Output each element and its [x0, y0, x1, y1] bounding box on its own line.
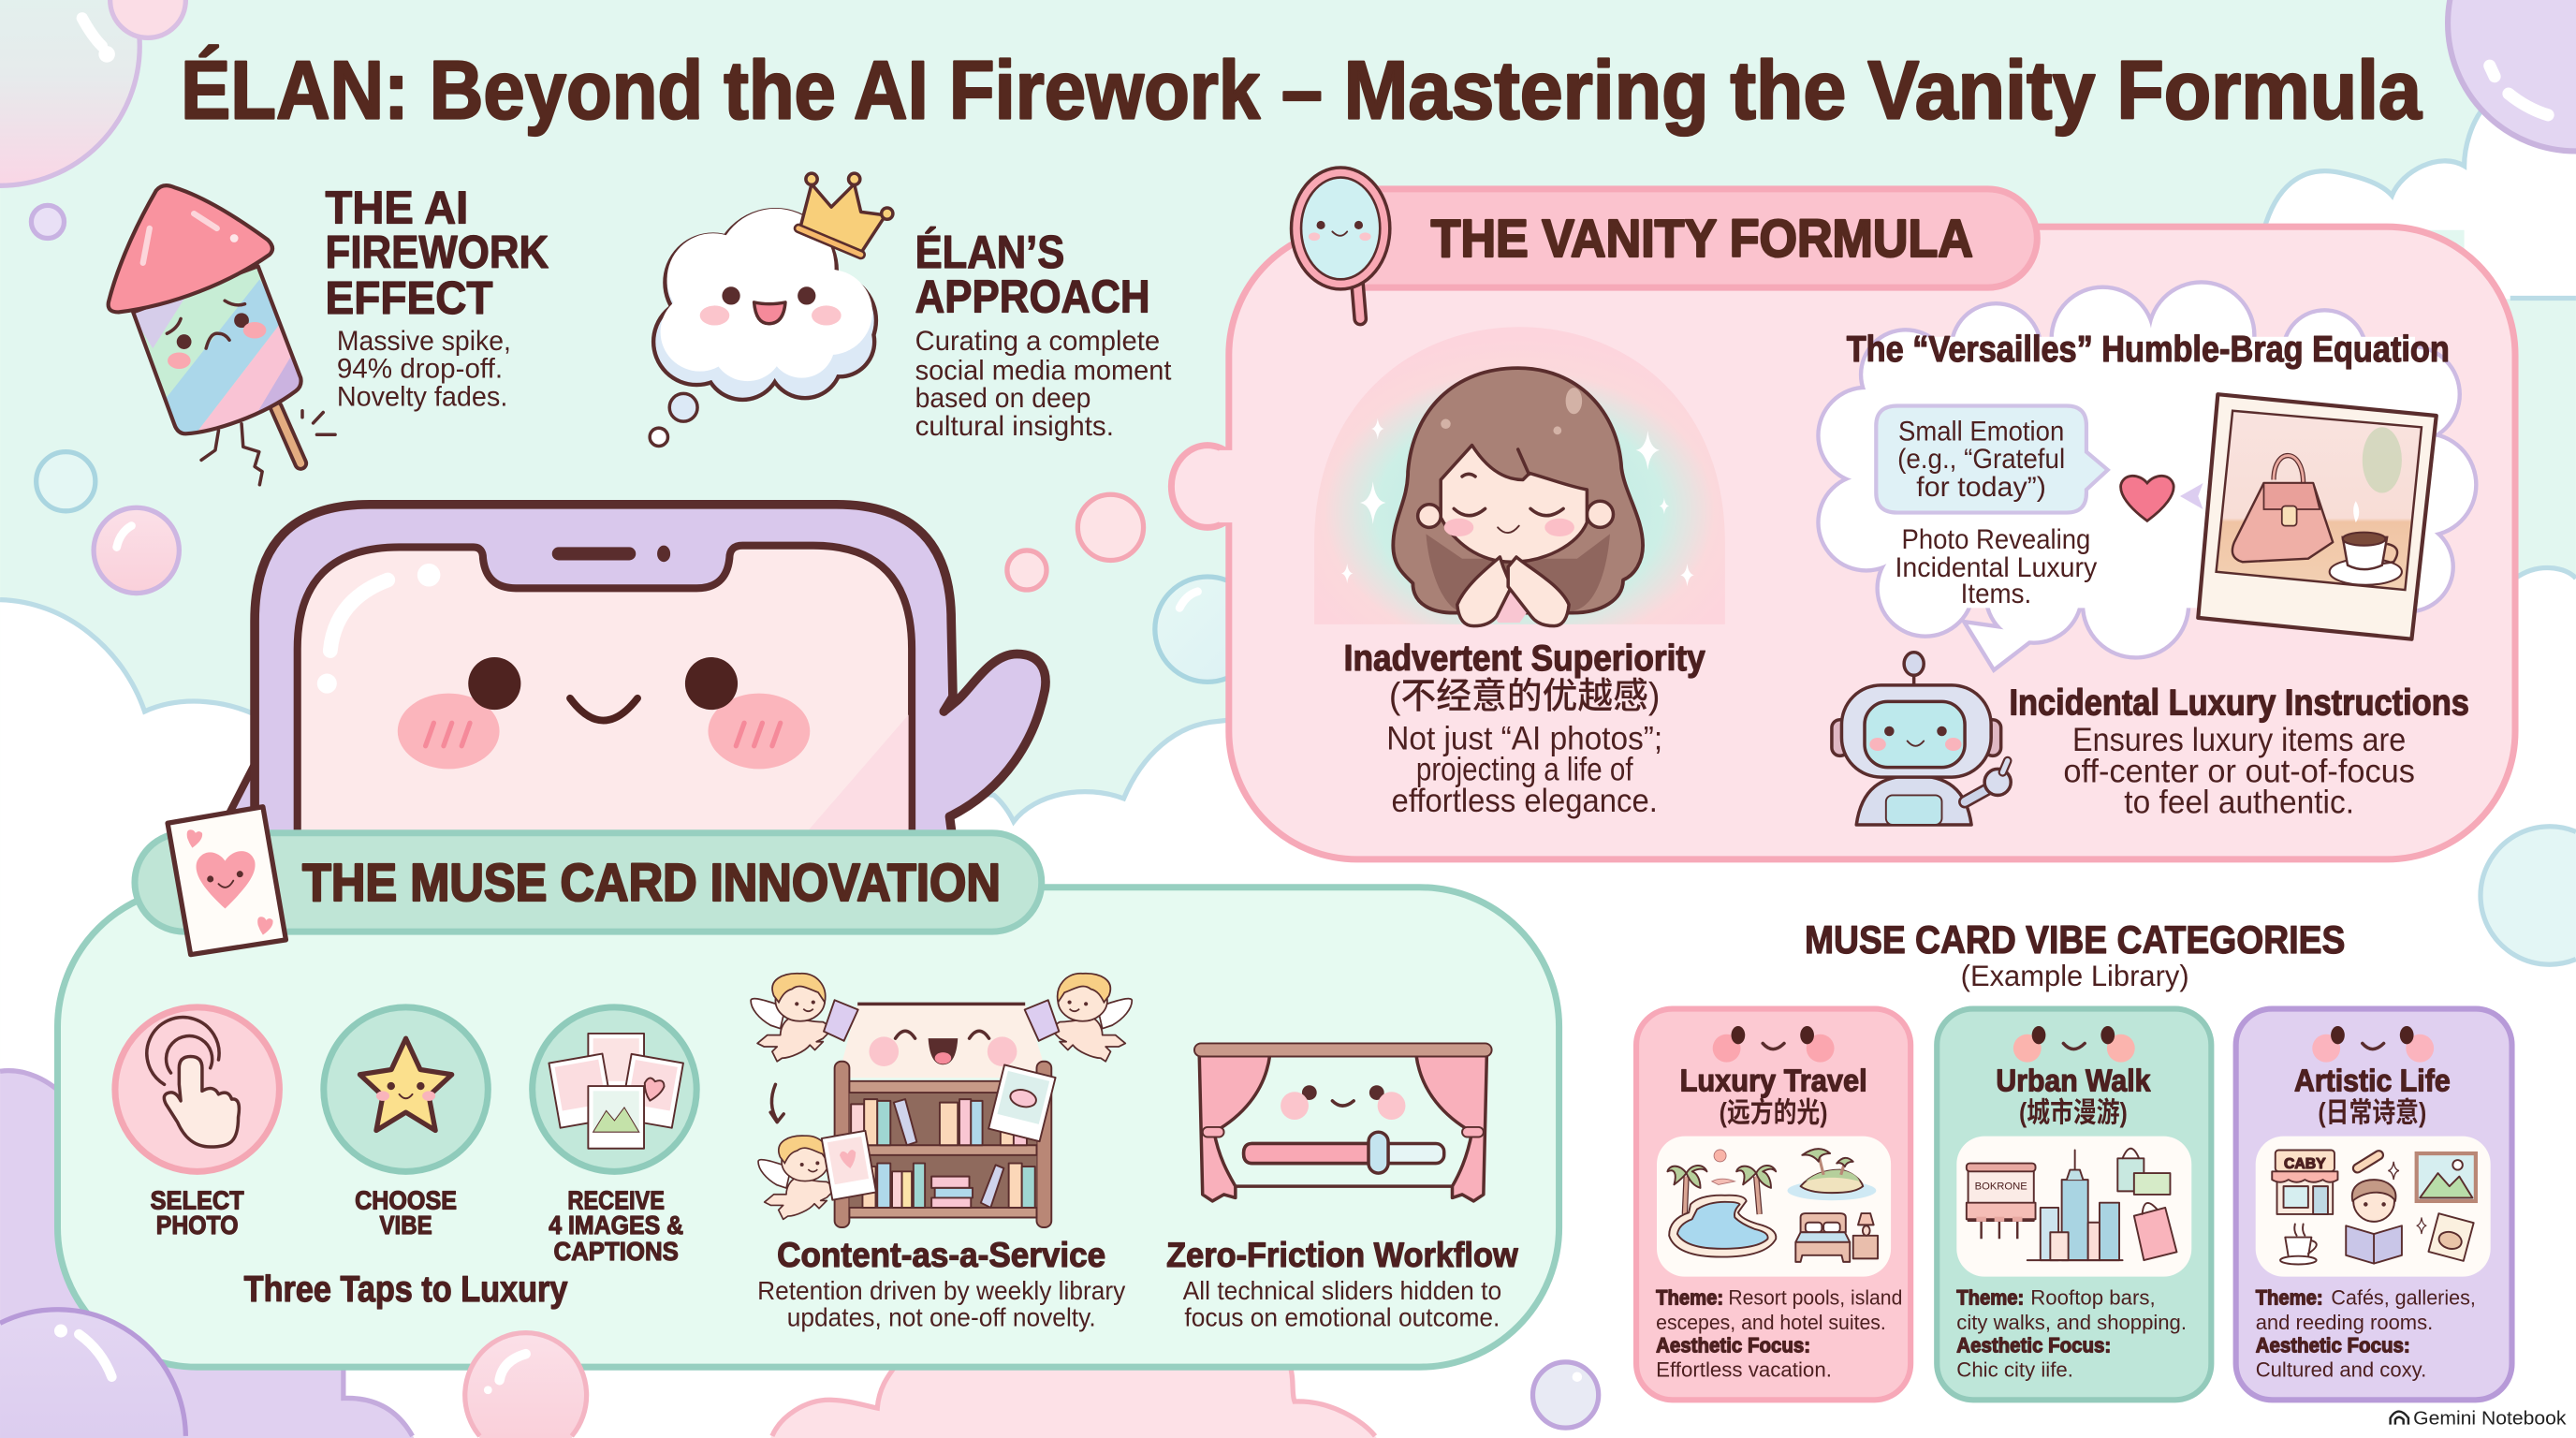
- heading: humble-brag equation: The “Versailles” Humble-Brag Equation: [1847, 330, 2450, 370]
- step 3: receive images and captions: CAPTIONS: [554, 1237, 679, 1266]
- text: artistic life theme: and reeding rooms.: [2256, 1311, 2433, 1334]
- card: urban walk: (城市漫游): [2019, 1098, 2128, 1129]
- watermark: Gemini Notebook: Gemini Notebook: [2413, 1409, 2567, 1430]
- step 1: select photo: SELECT: [151, 1186, 244, 1215]
- heading pill: the vanity formula: [1314, 189, 2037, 287]
- text: Élan's approach: ÉLAN’S: [915, 226, 1064, 278]
- title: ÉLAN: Beyond the AI Firework: [181, 44, 1260, 136]
- icon: heart playing card: [168, 807, 285, 955]
- text: zero friction workflow: All technical sliders hidden to: [1183, 1276, 1501, 1305]
- text: the AI firework effect: Novelty fades.: [337, 381, 507, 412]
- step 2: choose vibe: VIBE: [379, 1211, 432, 1240]
- text: incidental luxury instructions: off-center or out-of-focus: [2063, 753, 2415, 789]
- text: Élan's approach: [915, 226, 1172, 442]
- text: zero friction workflow: Zero-Friction Workflow: [1166, 1236, 1518, 1274]
- text: the AI firework effect: [326, 183, 549, 412]
- heading pill: muse card innovation: [135, 833, 1042, 932]
- step 1: select photo: PHOTO: [156, 1211, 239, 1240]
- text: zero friction workflow: [1166, 1236, 1518, 1331]
- card: luxury travel: (远方的光): [1720, 1098, 1828, 1129]
- title: Mastering the Vanity Formula: [1344, 44, 2422, 136]
- text: luxury travel theme: Effortless vacation.: [1656, 1358, 1832, 1382]
- text: luxury travel theme: [1656, 1285, 1902, 1382]
- illustration: rooftop bar, skyline and shopping bags: BOKRONE: [1975, 1181, 2027, 1193]
- card: luxury travel: Luxury Travel: [1680, 1064, 1867, 1098]
- speech bubble: small emotion: [1876, 405, 2108, 513]
- text: artistic life theme: Aesthetic Focus:: [2256, 1333, 2410, 1357]
- callout: humble-brag equation cloud: [1821, 285, 2474, 825]
- text: Élan's approach: cultural insights.: [915, 411, 1114, 442]
- background: lilac cloud: [0, 1071, 414, 1438]
- text: luxury travel theme: Resort pools, island: [1728, 1285, 1902, 1309]
- step 1: select photo: [115, 1007, 279, 1240]
- card: artistic life: Artistic Life: [2294, 1064, 2451, 1098]
- text: urban walk theme: Chic city iife.: [1956, 1358, 2073, 1382]
- text: artistic life theme: Cafés, galleries,: [2331, 1285, 2476, 1309]
- illustration: cafe, gallery and reader: CABY: [2284, 1156, 2326, 1172]
- text: the AI firework effect: 94% drop-off.: [337, 354, 503, 385]
- text: photo revealing luxury: Photo Revealing: [1902, 524, 2090, 555]
- text: inadvertent superiority: [1344, 638, 1705, 819]
- card: luxury travel: [1636, 1009, 1910, 1400]
- text: Élan's approach: APPROACH: [915, 271, 1150, 322]
- decorative bubbles: upper area: [0, 0, 2576, 964]
- text: Élan's approach: Curating a complete: [915, 326, 1160, 357]
- title: [181, 44, 2422, 136]
- text: the AI firework effect: Massive spike,: [337, 326, 511, 357]
- heading pill: muse card innovation: THE MUSE CARD INNOVATION: [302, 853, 1001, 912]
- text: inadvertent superiority: effortless elegance.: [1392, 783, 1658, 819]
- step 3: receive images and captions: [533, 1007, 696, 1266]
- icon: friendly robot: [1832, 653, 2011, 825]
- card: artistic life: [2236, 1009, 2511, 1400]
- text: inadvertent superiority: (不经意的优越感): [1389, 676, 1661, 716]
- icon: heart: [2121, 476, 2174, 521]
- heading: muse card vibe categories: (Example Library): [1961, 959, 2189, 992]
- text: urban walk theme: [1956, 1285, 2187, 1382]
- text: incidental luxury instructions: to feel authentic.: [2124, 785, 2354, 821]
- speech bubble: small emotion: for today”): [1916, 472, 2046, 503]
- step 3: receive images and captions: 4 IMAGES &: [549, 1211, 683, 1240]
- arrow: lilac pointer: [2180, 483, 2203, 509]
- heading: muse card vibe categories: [1805, 917, 2345, 992]
- icon: crowned thought cloud: [650, 173, 893, 446]
- background: pink cloud: [770, 1364, 1377, 1438]
- illustration: cupids stocking smiling bookshelf: [751, 974, 1132, 1227]
- text: incidental luxury instructions: Incidental Luxury Instructions: [2009, 682, 2469, 723]
- illustration: resort pool, island and bed: [1667, 1149, 1878, 1262]
- decorative bubbles: lower area: [0, 1310, 1599, 1438]
- caption: three taps to luxury: Three Taps to Luxury: [244, 1269, 568, 1310]
- speech bubble: small emotion: Small Emotion: [1898, 416, 2064, 447]
- icon: smiling hand mirror: [1292, 168, 1390, 318]
- heading pill: the vanity formula: THE VANITY FORMULA: [1431, 209, 1973, 268]
- title: –: [1281, 44, 1323, 136]
- card: urban walk: [1937, 1009, 2211, 1400]
- illustration: smiling phone mascot: [225, 505, 1046, 862]
- text: inadvertent superiority: projecting a life of: [1416, 752, 1633, 788]
- text: Élan's approach: social media moment: [915, 355, 1172, 386]
- text: luxury travel theme: Theme:: [1656, 1285, 1723, 1309]
- text: content as a service: Retention driven by weekly library: [757, 1276, 1125, 1305]
- step 3: receive images and captions: RECEIVE: [567, 1186, 665, 1215]
- text: photo revealing luxury: Incidental Luxury: [1895, 552, 2097, 583]
- text: luxury travel theme: Aesthetic Focus:: [1656, 1333, 1810, 1357]
- illustration: serene girl with rainbow aura: [1314, 327, 1725, 626]
- card: urban walk: Urban Walk: [1996, 1064, 2151, 1098]
- text: inadvertent superiority: Inadvertent Superiority: [1344, 638, 1705, 679]
- text: Élan's approach: based on deep: [915, 383, 1090, 414]
- text: content as a service: updates, not one-off novelty.: [787, 1302, 1096, 1331]
- illustration: curtain hiding sliders: [1194, 1043, 1492, 1201]
- text: photo revealing luxury: [1895, 524, 2097, 609]
- text: urban walk theme: city walks, and shopping.: [1956, 1311, 2187, 1334]
- text: artistic life theme: [2256, 1285, 2476, 1382]
- icon: sad firework rocket: [109, 185, 335, 485]
- text: the AI firework effect: FIREWORK: [326, 227, 549, 278]
- heading: muse card vibe categories: MUSE CARD VIBE CATEGORIES: [1805, 917, 2345, 961]
- illustration: polaroid of bag and coffee: [2198, 394, 2437, 639]
- text: urban walk theme: Theme:: [1956, 1285, 2024, 1309]
- text: content as a service: [757, 1236, 1125, 1331]
- text: the AI firework effect: EFFECT: [326, 273, 493, 324]
- speech bubble: small emotion: (e.g., “Grateful: [1897, 444, 2065, 475]
- text: luxury travel theme: escepes, and hotel suites.: [1656, 1311, 1886, 1334]
- illustration: cafe, gallery and reader: [2272, 1151, 2476, 1264]
- panel: the Muse Card innovation: [57, 807, 1559, 1367]
- text: artistic life theme: Cultured and coxy.: [2256, 1358, 2426, 1382]
- text: the AI firework effect: THE AI: [326, 183, 468, 234]
- panel: the vanity formula: [1171, 168, 2567, 1430]
- text: artistic life theme: Theme:: [2256, 1285, 2323, 1309]
- step 2: choose vibe: CHOOSE: [355, 1186, 457, 1215]
- text: urban walk theme: Rooftop bars,: [2030, 1285, 2156, 1309]
- text: urban walk theme: Aesthetic Focus:: [1956, 1333, 2111, 1357]
- card: artistic life: (日常诗意): [2318, 1098, 2426, 1129]
- text: incidental luxury instructions: Ensures luxury items are: [2072, 722, 2406, 758]
- step 2: choose vibe: [324, 1007, 488, 1240]
- text: content as a service: Content-as-a-Service: [777, 1236, 1105, 1274]
- text: incidental luxury instructions: [2009, 682, 2469, 821]
- text: inadvertent superiority: Not just “AI photos”;: [1386, 720, 1662, 756]
- text: photo revealing luxury: Items.: [1961, 579, 2031, 609]
- text: zero friction workflow: focus on emotional outcome.: [1184, 1302, 1500, 1331]
- illustration: rooftop bar, skyline and shopping bags: [1967, 1149, 2176, 1260]
